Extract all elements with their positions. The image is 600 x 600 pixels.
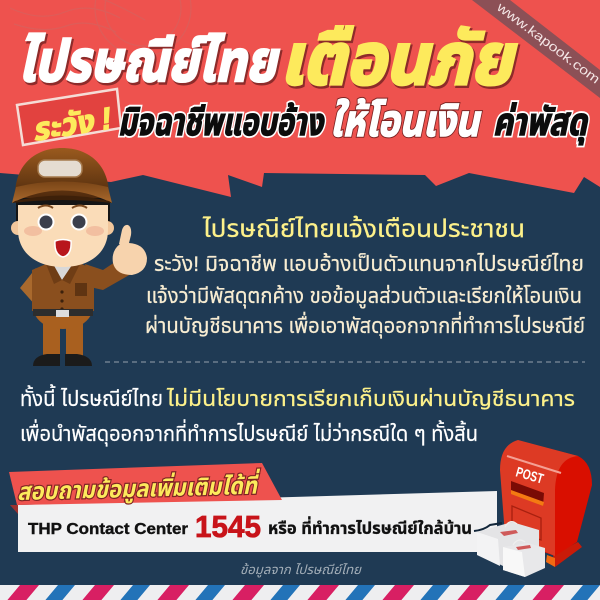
postmark stamp decoration [10,0,191,56]
source note: ข้อมูลจาก ไปรษณีย์ไทย [240,562,362,578]
contact banner: สอบถามข้อมูลเพิ่มเติมได้ที่ [17,468,262,507]
collar [52,266,72,280]
title: เตือนภัย [282,22,518,102]
subtitle: ให้โอนเงิน [330,97,481,146]
pointing hand [113,225,147,275]
notice body text [145,252,585,339]
title [18,20,518,102]
contact box: THP Contact Center [28,521,188,538]
warning badge [17,89,121,148]
notice body text: แจ้งว่ามีพัสดุตกค้าง ขอข้อมูลส่วนตัวและเรียกให้โอนเงิน [146,284,582,309]
hat plaque [38,160,82,177]
contact box [18,491,497,552]
post box [500,440,592,567]
subtitle [118,97,589,146]
policy statement: ทั้งนี้ ไปรษณีย์ไทย [20,384,163,411]
postman character [11,148,147,366]
belt [33,309,93,316]
pocket and buttons [75,283,87,296]
policy statement: ไม่มีนโยบายการเรียกเก็บเงินผ่านบัญชีธนาคาร [166,386,575,411]
warning badge: ระวัง ! [30,101,114,148]
corner ribbon with site address: www.kapook.com [493,0,600,87]
hair and ears [16,198,110,228]
shoes [33,354,60,366]
parcels [474,522,545,577]
title: ไปรษณีย์ไทย [18,30,280,94]
hat crown [15,148,109,198]
post box: POST [514,464,546,487]
subtitle: มิจฉาชีพแอบอ้าง [118,102,325,144]
torso [32,264,94,311]
mouth [55,240,71,257]
contact banner [9,463,282,514]
title: ไปรษณีย์ไทย [20,32,281,96]
hat brim [12,182,112,203]
eyes [38,214,54,230]
subtitle: มิจฉาชีพแอบอ้าง [118,102,325,144]
notice body text: ผ่านบัญชีธนาคาร เพื่อเอาพัสดุออกจากที่ทำการไปรษณีย์ [145,311,585,339]
notice body text: ระวัง! มิจฉาชีพ แอบอ้างเป็นตัวแทนจากไปรษณีย์ไทย [154,252,584,276]
red header panel [0,0,600,197]
policy statement: เพื่อนำพัสดุออกจากที่ทำการไปรษณีย์ ไม่ว่ากรณีใด ๆ ทั้งสิ้น [20,419,478,447]
airmail stripe border [0,585,600,600]
left arm [20,268,36,306]
subtitle: ให้โอนเงิน [330,97,481,146]
title: เตือนภัย [280,20,517,100]
legs [43,318,60,356]
face [18,205,108,267]
contact box: หรือ ที่ทำการไปรษณีย์ใกล้บ้าน [268,516,472,538]
right arm [85,262,131,290]
eyebrows [38,206,87,208]
contact box: 1545 [195,509,261,544]
policy statement [20,384,575,447]
corner ribbon with site address [472,0,600,98]
notice heading: ไปรษณีย์ไทยแจ้งเตือนประชาชน [202,215,525,243]
